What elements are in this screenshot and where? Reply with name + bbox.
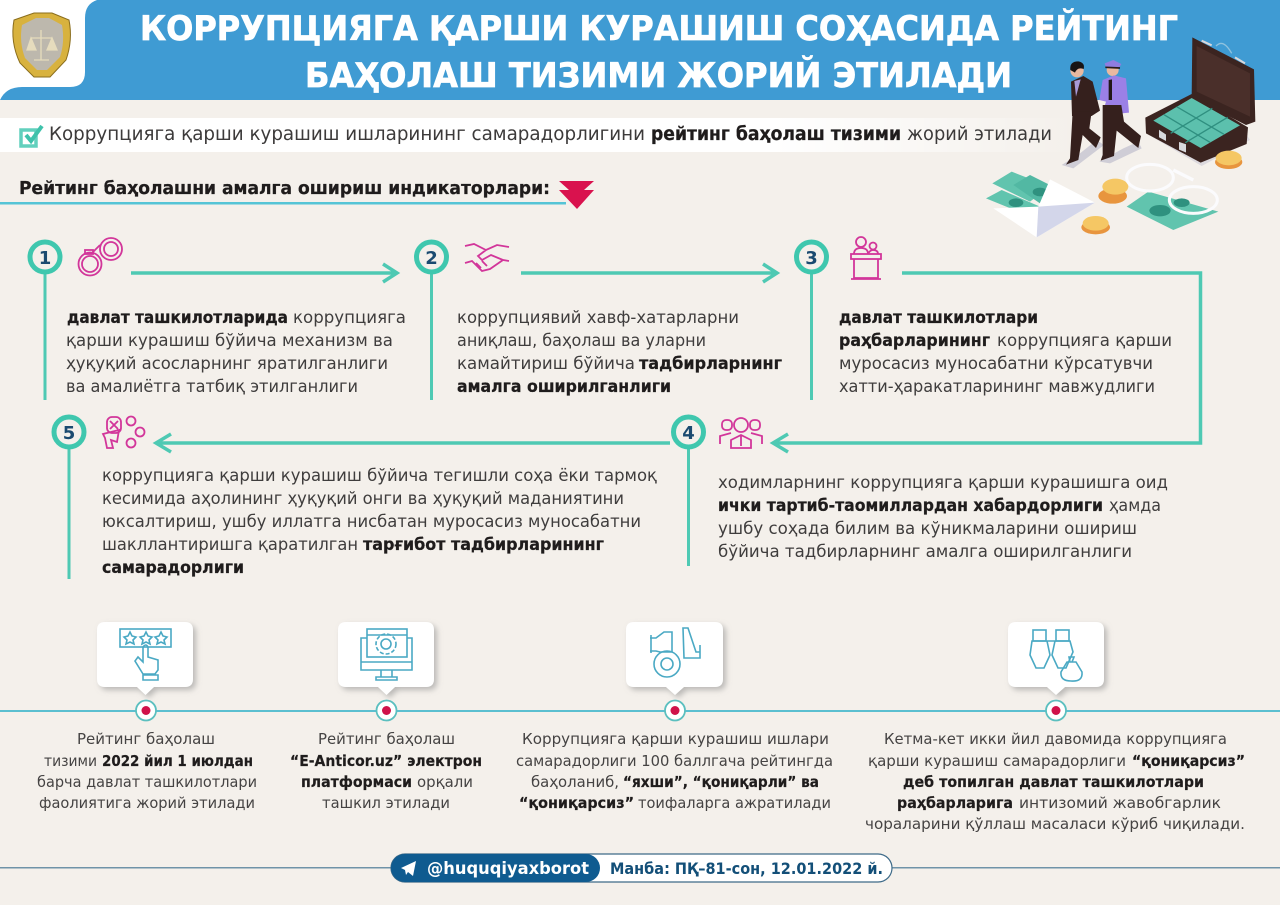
step 3: муросасиз муносабатни кўрсатувчи [839, 354, 1153, 373]
step 2: тадбирларнинг [639, 354, 782, 373]
logo emblem [13, 13, 70, 77]
timeline item 2: Рейтинг баҳолаш [318, 730, 455, 748]
timeline item 1: фаолиятига жорий этилади [39, 794, 255, 812]
timeline item 4: қарши курашиш самарадорлиги [868, 752, 1126, 770]
title: БАҲОЛАШ ТИЗИМИ ЖОРИЙ ЭТИЛАДИ [305, 55, 1012, 95]
timeline item 2: платформаси [301, 773, 412, 791]
subtitle band [0, 118, 1075, 152]
icon: checkbox [21, 126, 42, 146]
timeline item 3: баҳоланиб, [531, 773, 619, 791]
step 1: коррупцияга [293, 308, 406, 327]
timeline item 1: тизими [44, 752, 97, 770]
step 5: юксалтириш, ушбу иллатга нисбатан муросасиз муносабатни [102, 512, 641, 531]
icon: people with megaphone [103, 416, 144, 448]
step 5: самарадорлиги [102, 558, 244, 577]
timeline item 4: деб топилган давлат ташкилотлари [903, 773, 1204, 791]
timeline item 4: раҳбарларига [897, 794, 1013, 812]
step 4: бўйича тадбирларнинг амалга оширилганлиги [718, 542, 1132, 561]
icon: red double arrow [559, 181, 594, 209]
flow connectors [45, 264, 1200, 579]
banknotes and handcuffs [1127, 164, 1218, 230]
step 4: ҳамда [1109, 496, 1161, 515]
timeline node [136, 700, 156, 720]
timeline item 3 [516, 622, 833, 812]
step 5: кесимида аҳолининг ҳуқуқий онги ва ҳуқуқий маданиятини [102, 489, 624, 508]
subtitle band: рейтинг баҳолаш тизими [651, 124, 901, 145]
timeline item 2 [290, 622, 482, 812]
coin stack and coins [1081, 151, 1242, 234]
timeline node [376, 700, 396, 720]
timeline node [665, 700, 685, 720]
timeline item 2: ташкил этилади [322, 794, 450, 812]
step 2: коррупциявий хавф-хатарларни [457, 308, 739, 327]
step 1: ҳуқуқий асосларнинг яратилганлиги [66, 354, 388, 373]
step 4: ушбу соҳада билим ва кўникмаларини ошириш [718, 519, 1137, 538]
header banner [0, 0, 1280, 100]
title: КОРРУПЦИЯГА ҚАРШИ КУРАШИШ СОҲАСИДА РЕЙТИНГ [140, 8, 1178, 48]
envelope with banknotes [986, 172, 1095, 237]
subtitle band: жорий этилади [907, 124, 1052, 145]
timeline item 2: орқали [417, 773, 473, 791]
footer source bar: Манба: ПҚ–81-сон, 12.01.2022 й. [610, 859, 883, 878]
callout: rating stars [97, 622, 193, 695]
step 2: аниқлаш, баҳолаш ва уларни [457, 331, 706, 350]
icon: telegram [401, 861, 416, 876]
briefcase [1145, 37, 1255, 166]
businessman [1062, 61, 1104, 168]
section heading: Рейтинг баҳолашни амалга ошириш индикаторлари: [19, 179, 550, 199]
timeline item 1: барча давлат ташкилотлари [37, 773, 257, 791]
timeline item 3: самарадорлиги 100 баллгача рейтингда [516, 752, 833, 770]
step 2: камайтириш бўйича [457, 354, 635, 373]
timeline item 3: Коррупцияга қарши курашиш ишлари [522, 730, 829, 748]
step 5: коррупцияга қарши курашиш бўйича тегишли соҳа ёки тармоқ [102, 466, 657, 485]
step 1: ва амалиётга татбиқ этилганлиги [66, 377, 358, 396]
step 2: амалга оширилганлиги [457, 377, 671, 396]
step 5: 5 [63, 423, 75, 444]
icon: handshake [465, 244, 509, 271]
timeline item 1: Рейтинг баҳолаш [77, 730, 215, 748]
timeline item 3: “қониқарсиз” [519, 794, 634, 812]
timeline node [1046, 700, 1066, 720]
section heading [0, 179, 594, 209]
step 3: 3 [805, 248, 818, 269]
icon: handcuffs [78, 238, 122, 276]
police officer [1099, 60, 1142, 163]
timeline item 4: интизомий жавобгарлик [1019, 794, 1221, 812]
subtitle band: Коррупцияга қарши курашиш ишларининг самарадорлигини [49, 124, 645, 145]
step 5 [54, 416, 657, 577]
illustration: arrest, briefcase and money [986, 37, 1255, 237]
step 5: шакллантиришга қаратилган [102, 535, 358, 554]
step 1 [30, 238, 406, 396]
timeline line [0, 710, 1280, 712]
step 2 [416, 242, 782, 396]
callout: monitor with gear [338, 622, 434, 695]
timeline item 1: 2022 йил 1 июлдан [102, 752, 253, 770]
step 3: коррупцияга қарши [997, 331, 1172, 350]
step 4: 4 [682, 423, 695, 444]
callout: refusing a bribe [626, 622, 723, 695]
step 3: давлат ташкилотлари [839, 308, 1038, 327]
icon: podium [851, 237, 881, 279]
step 1: қарши курашиш бўйича механизм ва [66, 331, 393, 350]
step 1: 1 [39, 248, 51, 269]
step 3: хатти-ҳаракатларининг мавжудлиги [839, 377, 1155, 396]
timeline item 1 [37, 622, 257, 812]
step 3: раҳбарларининг [839, 331, 990, 350]
timeline item 4: чораларини қўллаш масаласи кўриб чиқилади. [865, 815, 1245, 833]
step 5: тарғибот тадбирларининг [363, 535, 604, 554]
timeline item 4 [865, 622, 1245, 833]
callout: cuffed hands with money bag [1008, 622, 1104, 695]
timeline item 3: “яхши”, “қониқарли” ва [623, 773, 819, 791]
footer source bar [0, 854, 1280, 882]
step 4: ходимларнинг коррупцияга қарши курашишга оид [718, 473, 1168, 492]
footer source bar: @huquqiyaxborot [427, 859, 589, 879]
timeline item 4: “қониқарсиз” [1132, 752, 1245, 770]
timeline item 3: тоифаларга ажратилади [638, 794, 831, 812]
step 4: ички тартиб-таомиллардан хабардорлиги [718, 496, 1103, 515]
timeline item 4: Кетма-кет икки йил давомида коррупцияга [884, 730, 1227, 748]
title [140, 8, 1178, 95]
icon: team [720, 418, 762, 448]
step 3 [796, 237, 1172, 396]
timeline item 2: “E-Anticor.uz” электрон [290, 752, 482, 770]
step 4 [674, 417, 1168, 561]
step 1: давлат ташкилотларида [67, 308, 288, 327]
step 2: 2 [425, 248, 438, 269]
